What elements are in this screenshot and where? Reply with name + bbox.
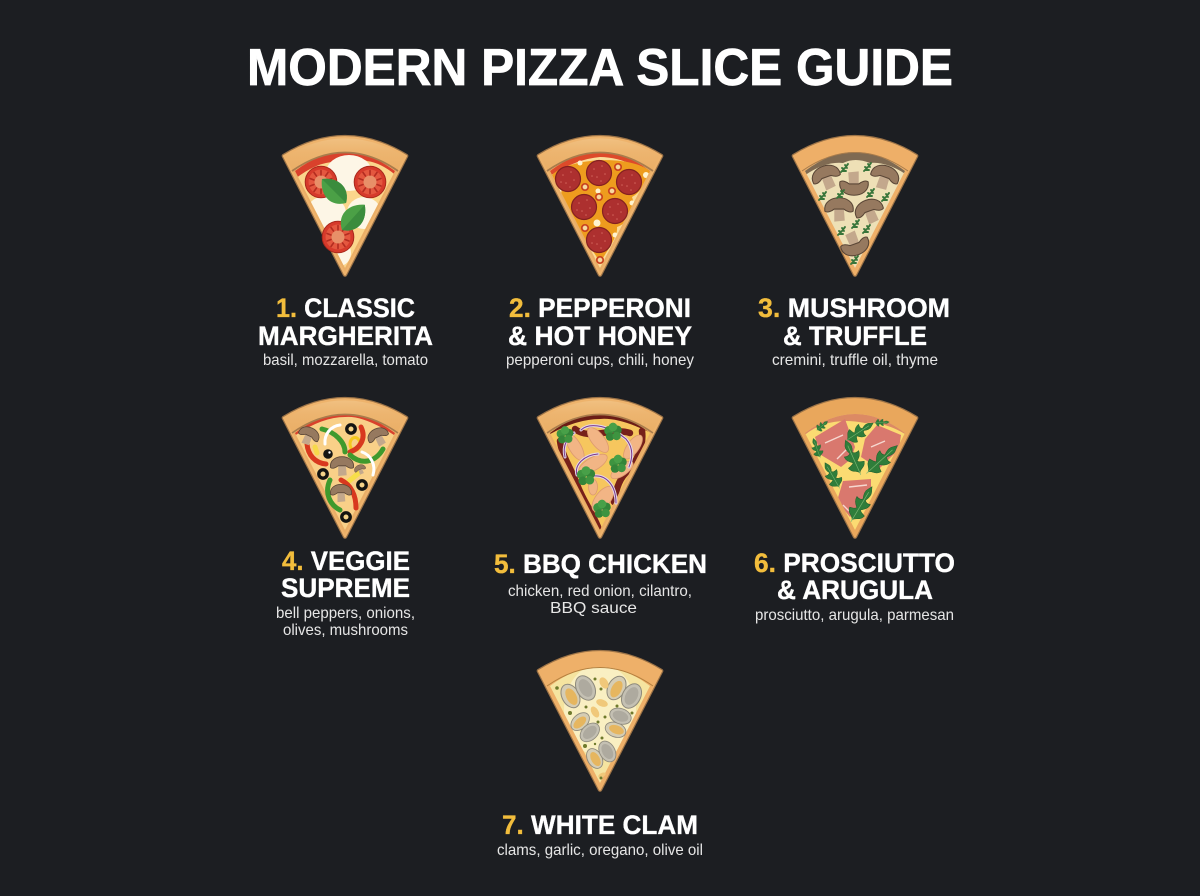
pizza slice 2: pepperoni and hot honey xyxy=(539,135,661,275)
slice 3 caption xyxy=(758,293,950,369)
pizza slice 7: white clam xyxy=(539,650,661,790)
slice 1 caption: basil, mozzarella, tomato xyxy=(263,352,428,369)
slice 7 caption xyxy=(497,810,703,859)
pizza slice 1: classic margherita xyxy=(284,135,406,275)
slice 5 caption: BBQ sauce xyxy=(550,600,637,617)
pizza slice 3: mushroom and truffle xyxy=(794,135,916,275)
slice 6 caption: 6. PROSCIUTTO xyxy=(754,548,955,578)
slice 4 caption: SUPREME xyxy=(281,573,410,603)
slice 6 caption xyxy=(754,548,955,624)
slice 3 caption: 3. MUSHROOM xyxy=(758,293,950,323)
pizza slice 6: prosciutto and arugula xyxy=(794,397,916,537)
slice 1 caption: MARGHERITA xyxy=(258,321,433,351)
slice 3 caption: & TRUFFLE xyxy=(783,321,927,351)
slice 5 caption: chicken, red onion, cilantro, xyxy=(508,583,692,600)
slice 7 caption: 7. WHITE CLAM xyxy=(502,810,698,840)
slice 1 caption: 1. CLASSIC xyxy=(276,293,415,323)
slice 6 caption: prosciutto, arugula, parmesan xyxy=(755,607,954,624)
slice 2 caption xyxy=(506,293,694,369)
slice 2 caption: 2. PEPPERONI xyxy=(509,293,691,323)
slice 3 caption: cremini, truffle oil, thyme xyxy=(772,352,938,369)
slice 6 caption: & ARUGULA xyxy=(777,575,933,605)
title: MODERN PIZZA SLICE GUIDE xyxy=(247,39,953,97)
slice 4 caption: 4. VEGGIE xyxy=(282,546,410,576)
slice 4 caption xyxy=(276,546,415,639)
slice 4 caption: olives, mushrooms xyxy=(283,622,408,639)
pizza slice 4: veggie supreme xyxy=(284,397,406,537)
slice 2 caption: pepperoni cups, chili, honey xyxy=(506,352,694,369)
slice 5 caption: 5. BBQ CHICKEN xyxy=(494,549,707,579)
slice 2 caption: & HOT HONEY xyxy=(508,321,692,351)
slice 7 caption: clams, garlic, oregano, olive oil xyxy=(497,842,703,859)
slice 5 caption xyxy=(494,549,707,617)
slice 4 caption: bell peppers, onions, xyxy=(276,605,415,622)
slice 1 caption xyxy=(258,293,433,369)
pizza slice 5: bbq chicken xyxy=(539,397,661,537)
